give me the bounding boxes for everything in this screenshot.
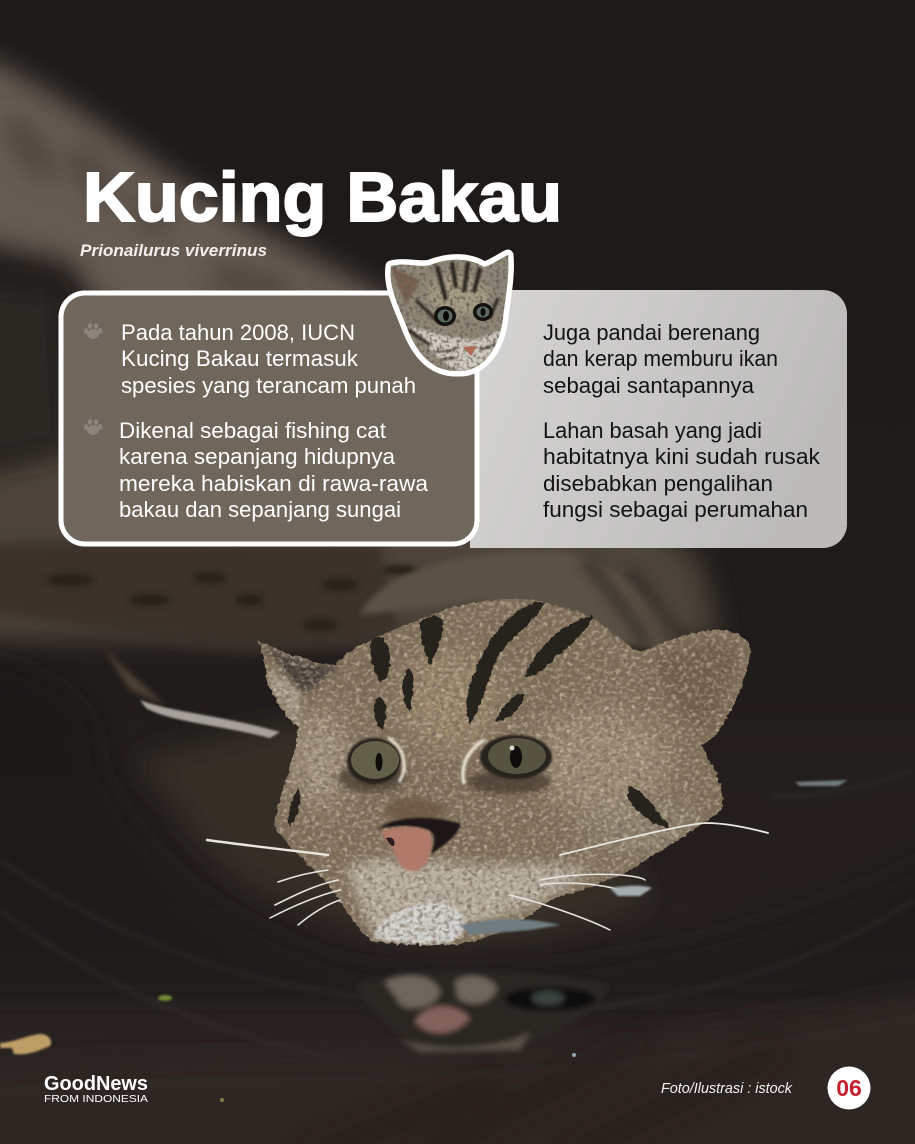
logo: GoodNews From Indonesia <box>44 1073 148 1105</box>
logo: GoodNews From Indonesia: GoodNews <box>44 1073 148 1095</box>
page number: 06 <box>836 1075 862 1101</box>
leaf <box>0 1034 51 1054</box>
title: Kucing Bakau <box>83 158 562 236</box>
logo: GoodNews From Indonesia: FROM INDONESIA <box>44 1093 148 1105</box>
right facts text: Juga pandai berenang <box>543 320 760 345</box>
head stripes <box>289 602 670 828</box>
blurred tail <box>0 40 430 430</box>
icon: paw 1 <box>84 323 102 339</box>
panel: left facts <box>61 293 477 544</box>
cat back <box>360 552 685 655</box>
left facts text: Dikenal sebagai fishing cat <box>119 418 386 443</box>
muzzle white <box>345 859 590 941</box>
right facts text <box>543 320 821 522</box>
left facts text: Pada tahun 2008, IUCN <box>121 320 355 345</box>
dark water ripples <box>0 770 915 1060</box>
fur texture <box>261 599 749 946</box>
water around head <box>130 720 650 942</box>
panel: right facts <box>470 290 847 548</box>
left ear inner <box>262 643 340 695</box>
left facts text <box>119 320 429 522</box>
left facts text: Kucing Bakau termasuk <box>121 346 359 371</box>
eye shadows <box>338 764 406 792</box>
left facts text: mereka habiskan di rawa-rawa <box>119 471 429 496</box>
page number <box>828 1066 870 1110</box>
ripple highlights <box>610 886 652 896</box>
right facts text: disebabkan pengalihan <box>543 471 773 496</box>
left eye <box>347 738 404 784</box>
right ear inner <box>650 641 735 735</box>
reflection <box>355 971 610 1052</box>
nose <box>378 818 461 871</box>
right facts text: fungsi sebagai perumahan <box>543 497 808 522</box>
main cat photo illustration <box>207 552 770 1052</box>
right facts text: sebagai santapannya <box>543 373 755 398</box>
left facts text: bakau dan sepanjang sungai <box>119 497 401 522</box>
right facts text: habitatnya kini sudah rusak <box>543 444 821 469</box>
left facts text: spesies yang terancam punah <box>121 373 416 398</box>
right eye <box>463 735 552 784</box>
cat head sticker <box>385 250 515 380</box>
whiskers <box>207 823 768 930</box>
head with fur <box>258 598 752 946</box>
right facts text: dan kerap memburu ikan <box>543 346 778 371</box>
blurred body behind panels <box>0 349 720 640</box>
left facts text: karena sepanjang hidupnya <box>119 444 396 469</box>
water glints <box>140 700 280 738</box>
fur light patches <box>292 630 700 855</box>
photo credit: Foto/Ilustrasi : istock <box>661 1080 793 1097</box>
scientific name: Prionailurus viverrinus <box>80 241 267 260</box>
icon: paw 2 <box>84 419 102 435</box>
right facts text: Lahan basah yang jadi <box>543 418 762 443</box>
